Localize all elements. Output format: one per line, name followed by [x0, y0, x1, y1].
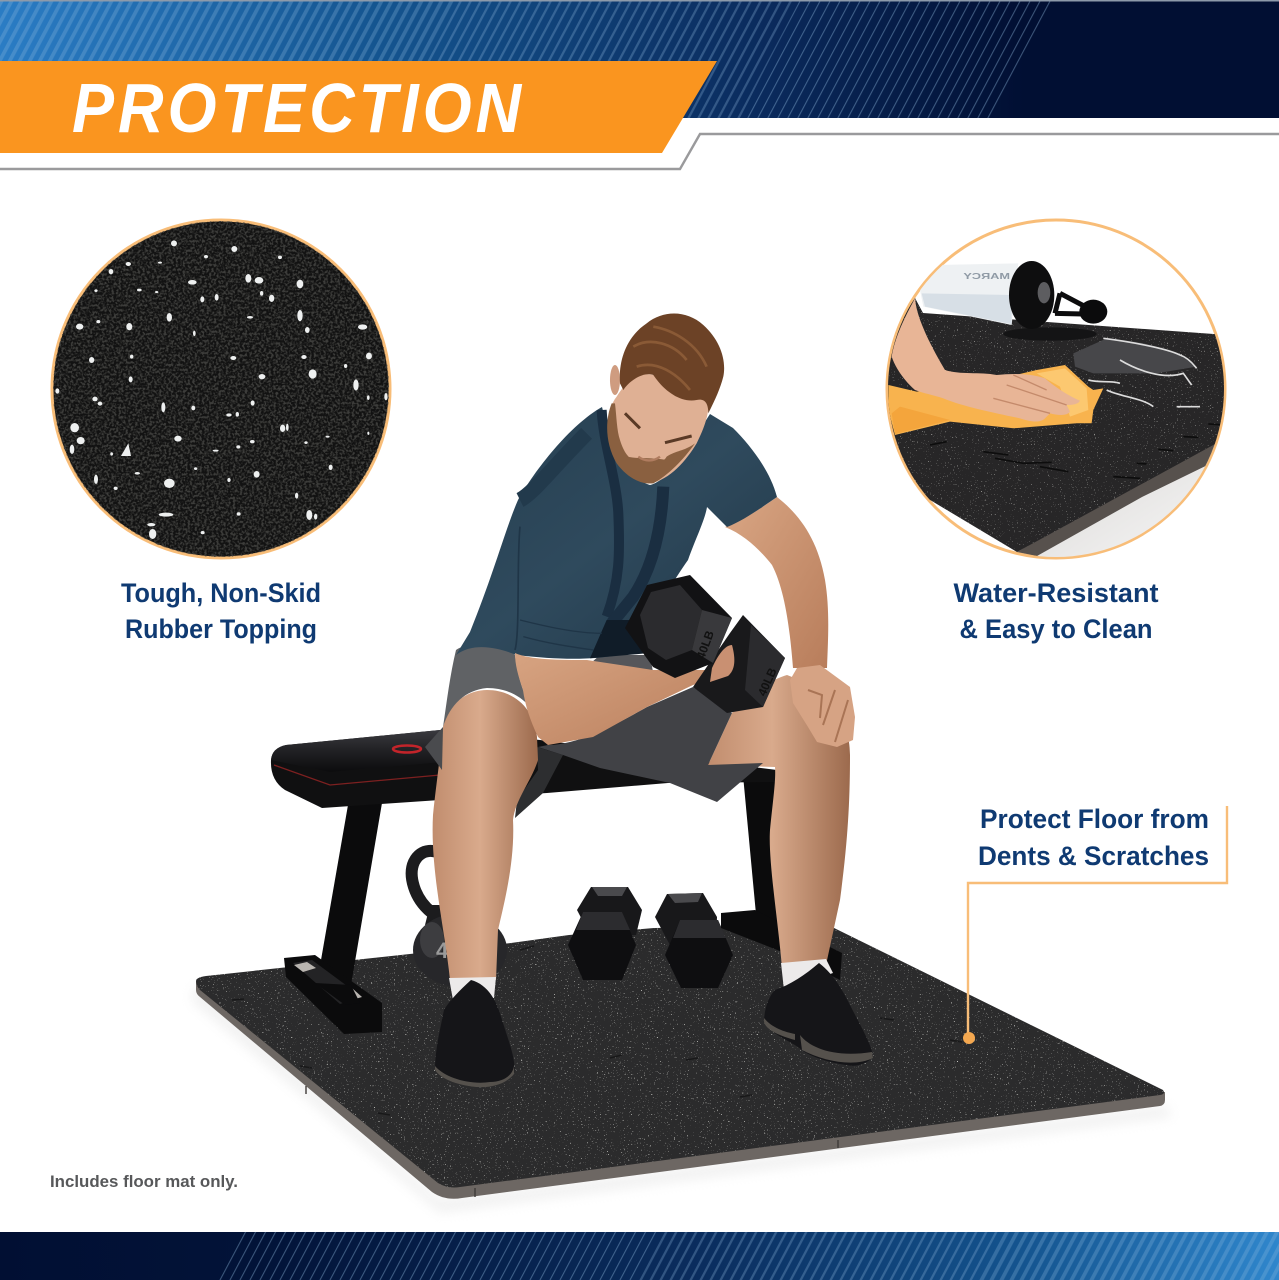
water spill	[1003, 327, 1200, 407]
label: rubber topping: Rubber Topping	[125, 614, 317, 644]
shorts lower flap	[515, 747, 563, 818]
grey shorts	[443, 645, 530, 727]
shorts flap at bench	[425, 727, 443, 770]
beard	[607, 403, 695, 484]
kettlebell	[412, 851, 507, 987]
callout: floor protection: Protect Floor from	[980, 804, 1209, 834]
top banner	[0, 0, 1279, 118]
right arm	[725, 497, 828, 668]
held dumbbell	[625, 575, 785, 713]
weight bench	[271, 730, 842, 1034]
towel	[888, 365, 1103, 435]
label: water-resistant	[954, 578, 1159, 644]
held dumbbell: 40LB	[755, 665, 780, 698]
bottom banner	[0, 1232, 1279, 1280]
face	[608, 374, 709, 483]
head	[607, 314, 724, 484]
label: water-resistant: Water-Resistant	[954, 578, 1159, 608]
shirt dark folds and sleeve details	[515, 410, 663, 658]
label: water-resistant: & Easy to Clean	[960, 614, 1152, 644]
nose shadow	[638, 457, 660, 460]
kettlebell: 4	[436, 938, 449, 963]
label: rubber topping: Tough, Non-Skid	[121, 578, 321, 608]
panel: water-resistant circle	[880, 220, 1240, 570]
mouth area	[623, 455, 667, 470]
header white band with grey rule	[0, 118, 1279, 170]
right shoe	[764, 963, 873, 1066]
athlete	[425, 314, 873, 1087]
dumbbells on the floor	[568, 887, 733, 988]
curling arm	[515, 640, 736, 745]
dark shorts	[538, 687, 763, 802]
right leg	[708, 675, 850, 968]
floor mat	[190, 920, 1172, 1212]
socks	[449, 959, 833, 1000]
bench legs	[284, 775, 842, 1034]
held dumbbell: 40LB	[694, 628, 717, 661]
water bottle	[920, 261, 1107, 329]
floor and mat edge	[888, 298, 1224, 557]
panel: rubber texture circle	[52, 220, 390, 558]
hand on knee	[790, 665, 855, 747]
fist	[710, 645, 734, 682]
water bottle: MARCY	[963, 271, 1010, 281]
title banner: PROTECTION	[72, 70, 523, 148]
callout: floor protection	[963, 804, 1227, 1044]
hand	[892, 298, 1080, 421]
shirt	[456, 407, 777, 659]
left shoe	[435, 980, 514, 1087]
callout: floor protection: Dents & Scratches	[978, 841, 1209, 871]
title banner	[0, 61, 717, 153]
footnote: Includes floor mat only.	[50, 1173, 238, 1191]
label: rubber topping	[121, 578, 321, 644]
bench seat	[271, 730, 777, 808]
hair	[620, 314, 724, 413]
eyes and brows	[625, 413, 692, 443]
ear	[610, 365, 620, 395]
left leg	[433, 690, 538, 980]
shorts above forearm	[583, 655, 653, 672]
